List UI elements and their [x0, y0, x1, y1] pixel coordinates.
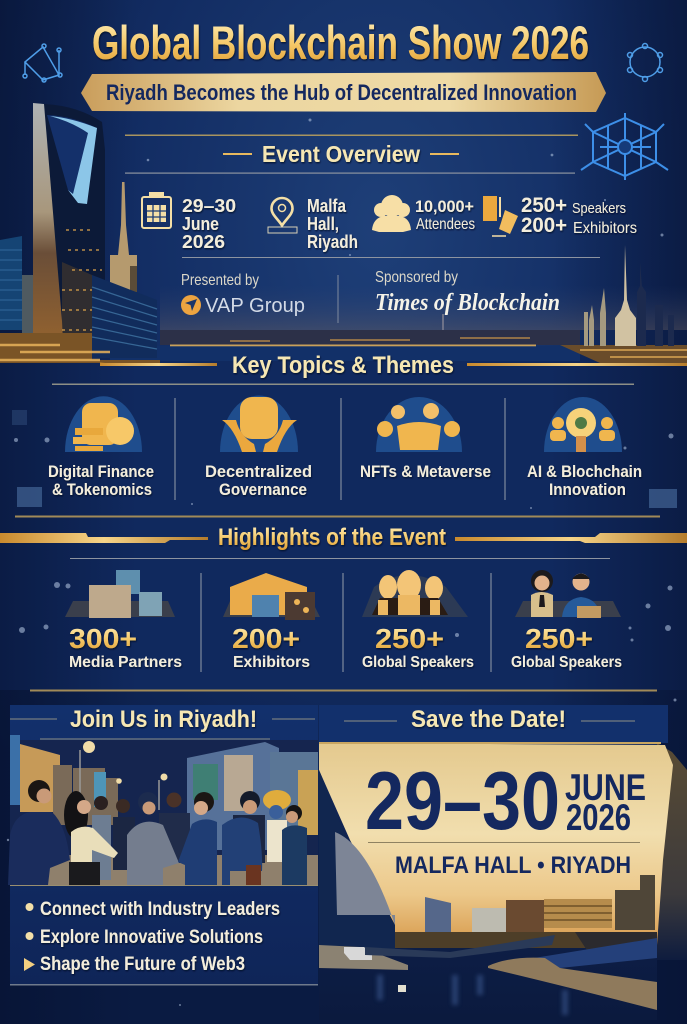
highlight dividers: [201, 573, 491, 672]
base light highlights: [0, 345, 110, 360]
item three: Shape the Future of Web3: [40, 954, 245, 975]
exhibitors text: 200+: [521, 214, 567, 237]
lit screen: [94, 772, 106, 807]
overview top rule: [125, 134, 578, 136]
bullet one: [26, 903, 34, 911]
foreground people: [8, 780, 307, 885]
date text: June: [182, 214, 219, 234]
header: [319, 705, 668, 743]
gold bar left: [0, 533, 208, 543]
stat label: Global Speakers: [511, 654, 622, 671]
presented by label: Presented by: [181, 272, 259, 289]
stat value: 250+: [375, 623, 444, 654]
highlight: global speakers two: [511, 570, 622, 671]
tower: spire: [110, 182, 137, 293]
sponsor divider: [338, 275, 339, 323]
right blue stripes: [92, 287, 157, 349]
lower scene background: [319, 742, 657, 1020]
shoreline gold line: [170, 344, 536, 346]
topic: AI and blockchain: [527, 397, 642, 499]
stat value: 300+: [69, 623, 137, 654]
banner: [81, 72, 606, 112]
overview: location: [268, 196, 358, 252]
section rule: [15, 516, 660, 518]
stat label: Media Partners: [69, 654, 182, 671]
white hall: [472, 908, 517, 932]
VAP Group wordmark: VAP Group: [205, 295, 305, 317]
icon: coins and tokens: [65, 396, 142, 452]
street lamps: [80, 750, 159, 810]
highlight: media partners: [65, 570, 182, 671]
brown block: [506, 900, 544, 932]
right ramp: [522, 938, 657, 968]
heading dashes: [223, 153, 459, 155]
icon: calendar: [142, 192, 171, 228]
location text: Riyadh: [307, 232, 358, 252]
tower lit face: [33, 103, 64, 345]
highlights rule: [70, 558, 610, 559]
banner shape: [81, 72, 606, 112]
venue: MALFA HALL • RIYADH: [395, 852, 631, 879]
item one: Connect with Industry Leaders: [40, 899, 280, 920]
bullet two: [26, 932, 34, 940]
gold shore: [560, 345, 687, 363]
exhibitors text: Exhibitors: [573, 220, 637, 237]
overview heading: Event Overview: [262, 141, 420, 167]
location text: Malfa: [307, 196, 347, 216]
road left: [319, 945, 408, 970]
topic: NFTs and metaverse: [360, 397, 491, 481]
stat label: Exhibitors: [233, 654, 310, 671]
icon: AI tree with people: [544, 397, 622, 452]
gold band right: [467, 363, 687, 366]
key topics heading text: Key Topics & Themes: [232, 352, 454, 379]
panel: save the date: [319, 705, 687, 1020]
gold shore lights: [580, 350, 687, 357]
heading lines: [344, 720, 635, 722]
band: lower sections background: [0, 346, 687, 690]
section: highlights heading: [0, 524, 687, 559]
water strip: [110, 346, 580, 361]
right booth: [270, 752, 318, 830]
topic: digital finance: [48, 396, 154, 499]
booth wall: [187, 742, 279, 850]
dark foreground shape: [319, 770, 395, 955]
illustration: networking crowd: [8, 735, 318, 885]
shoreline strip: [160, 314, 580, 345]
cream tower with spire: [615, 245, 636, 346]
panel bottom rule: [10, 984, 318, 986]
blue building: [10, 735, 20, 805]
speakers text: Speakers: [572, 200, 626, 217]
water reflections: [380, 975, 565, 1015]
date text: 2026: [182, 232, 225, 252]
topic label: NFTs & Metaverse: [360, 463, 491, 481]
sponsors row: [181, 257, 600, 323]
gold block floors: [544, 906, 612, 920]
bullet list: [24, 899, 280, 975]
right bank: [488, 958, 657, 1010]
lamp globes: [83, 741, 168, 784]
topic label: Governance: [219, 481, 307, 499]
topic label: Decentralized: [205, 463, 312, 481]
icon: avatars: [376, 397, 462, 452]
highlights heading text: Highlights of the Event: [218, 524, 446, 551]
icon: pin: [268, 198, 297, 233]
panel: join us: [8, 705, 318, 986]
overview lower rule: [125, 172, 575, 174]
key topics rule: [52, 384, 634, 385]
gold building: [20, 744, 60, 812]
attendees text: Attendees: [416, 216, 475, 233]
right blocks: [615, 875, 655, 930]
panel background: [10, 705, 318, 985]
right edge texture: [652, 740, 687, 960]
divider: [368, 842, 640, 843]
tower lower glow: [62, 262, 92, 345]
join heading: Join Us in Riyadh!: [70, 706, 257, 733]
bullet three: [24, 958, 35, 971]
icon: left network: [23, 44, 62, 82]
icon: people: [372, 195, 411, 232]
building stripes: [0, 250, 22, 320]
spire dark side: [130, 266, 137, 292]
parchment: [319, 743, 673, 945]
icon: banners: [483, 196, 518, 236]
attendees text: 10,000+: [415, 197, 474, 216]
reflection light: [398, 985, 406, 992]
topic: governance: [205, 396, 312, 499]
icon: two speakers: [515, 570, 621, 618]
tower sky gap: [47, 115, 97, 204]
date text: 29–30: [182, 196, 236, 216]
icon: speaker group: [362, 570, 468, 617]
gold band left: [100, 362, 217, 366]
location text: Hall,: [307, 214, 339, 234]
illustration: city and river: [319, 770, 657, 1015]
Times of Blockchain wordmark: Times of Blockchain: [375, 290, 560, 316]
skyline: right towers: [560, 245, 687, 363]
icon: hexagon network: [581, 113, 668, 180]
heading lines: [10, 719, 315, 739]
hotel tower: [425, 897, 451, 935]
section rule bottom: [30, 690, 657, 692]
highlight: exhibitors: [223, 573, 320, 671]
icon: right circle network: [628, 44, 662, 82]
small mid building: [22, 275, 34, 333]
bridge: [365, 935, 555, 958]
item two: Explore Innovative Solutions: [40, 927, 263, 948]
overview: attendees: [372, 195, 475, 233]
overview: speakers and exhibitors: [483, 194, 637, 237]
gold poster: [298, 770, 318, 835]
night sky: [10, 740, 318, 885]
topic label: & Tokenomics: [52, 481, 152, 499]
right hill: [575, 932, 657, 955]
speakers text: 250+: [521, 194, 567, 217]
stat value: 250+: [525, 623, 593, 654]
skyline: left towers: [0, 103, 160, 363]
gold bar right: [455, 533, 687, 543]
icon: exhibit booth: [223, 573, 320, 620]
city backdrop: [53, 765, 118, 825]
overview: date: [142, 192, 236, 252]
stat label: Global Speakers: [362, 654, 474, 671]
topic label: Digital Finance: [48, 463, 154, 481]
tree line: [395, 932, 657, 948]
gold block: [544, 899, 612, 928]
highlight: global speakers one: [362, 570, 474, 671]
gold edge: [319, 742, 661, 744]
cars: [344, 947, 372, 960]
topic dividers: [175, 398, 505, 500]
year: 2026: [566, 797, 631, 838]
icon: VAP logo: [181, 295, 201, 315]
dark towers: [637, 262, 674, 346]
month: JUNE: [565, 767, 646, 808]
topic label: AI & Blochchain: [527, 463, 642, 481]
topic label: Innovation: [549, 481, 626, 499]
building: right blue: [92, 275, 157, 358]
flower: [263, 790, 291, 810]
decorative cubes: [12, 410, 677, 508]
background people: [92, 792, 265, 880]
poster screen: [224, 755, 253, 811]
panel rule: [10, 885, 318, 886]
green screen: [193, 764, 218, 800]
pale towers: [584, 288, 606, 346]
tower blue edge: [50, 116, 97, 204]
tower window lights: [62, 230, 102, 330]
banner text: Riyadh Becomes the Hub of Decentralized Innovation: [106, 80, 577, 105]
save the date heading: Save the Date!: [411, 706, 566, 733]
glass tower: [335, 832, 395, 925]
floor: [10, 855, 318, 885]
tower: Kingdom Centre: [33, 103, 105, 345]
row rule: [182, 257, 600, 258]
building: left blue: [0, 236, 22, 330]
stat value: 200+: [232, 623, 300, 654]
icon: media crates: [65, 570, 175, 618]
horizon glow: [160, 285, 687, 330]
section: key topics heading: [52, 352, 687, 385]
sponsored by label: Sponsored by: [375, 269, 458, 286]
icon: hands with token: [220, 396, 298, 452]
date numerals: 29–30: [365, 754, 560, 847]
base lights: [0, 333, 160, 363]
